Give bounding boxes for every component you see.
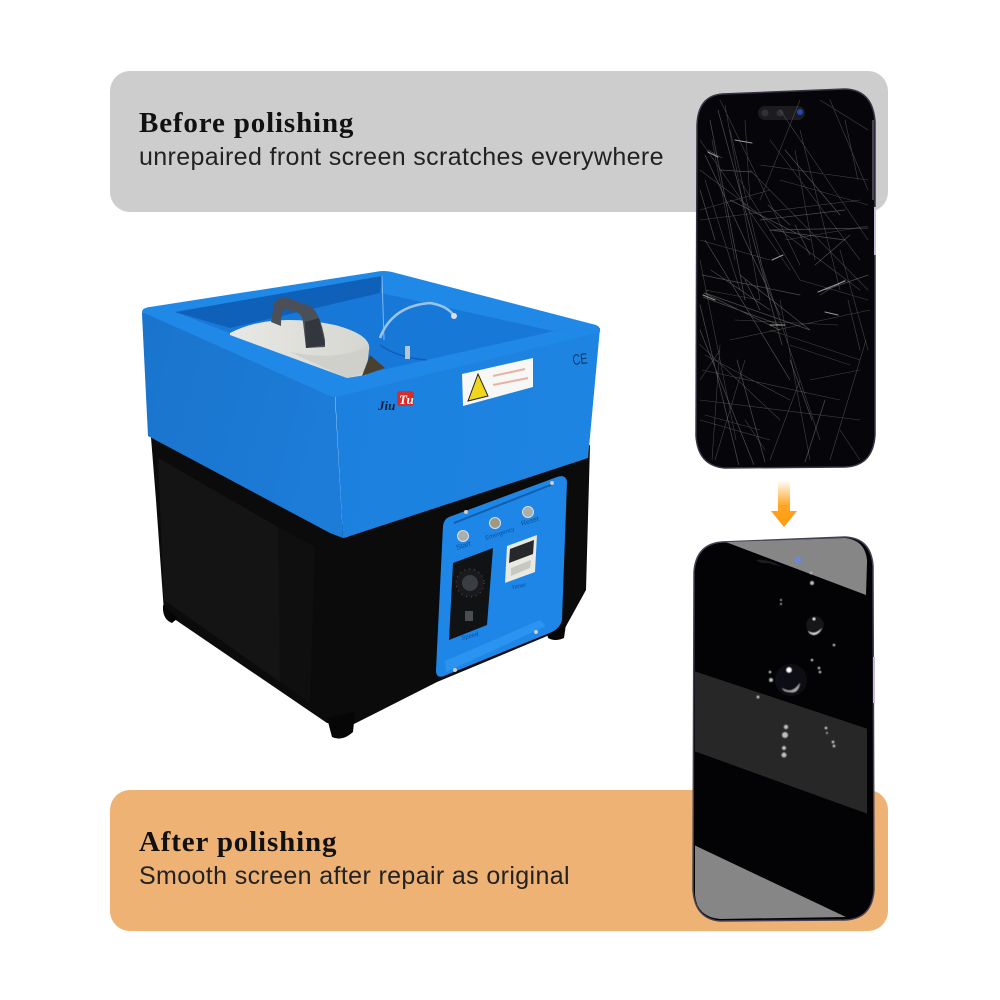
machine: JiuTu logo: Tu	[399, 392, 414, 407]
machine: water tube and post	[380, 303, 457, 359]
machine: polishing weight with handle	[230, 298, 385, 378]
phone: camera island	[758, 106, 805, 120]
machine: warning label	[462, 358, 533, 406]
machine blue top	[142, 271, 600, 538]
product: polishing machine	[142, 271, 600, 739]
machine: JiuTu logo: Jiu	[377, 398, 395, 413]
heading: after polishing: After polishing	[139, 826, 337, 858]
machine: control panel: Speed	[461, 632, 479, 642]
text: before description: unrepaired front screen scratches everywhere	[139, 143, 664, 171]
machine: control panel: Timer	[511, 582, 527, 592]
panel: after polishing	[110, 790, 888, 931]
machine: JiuTu logo	[377, 391, 414, 413]
phone: scratched screen	[695, 89, 875, 480]
arrow: before to after	[771, 480, 797, 527]
phone: scratch lines	[695, 100, 870, 480]
machine: control panel: Reset	[520, 516, 540, 528]
text: after description: Smooth screen after repair as original	[139, 862, 570, 890]
panel: before polishing	[110, 71, 888, 212]
machine: CE mark: CE	[572, 351, 588, 369]
machine: control panel	[436, 476, 567, 677]
phone: screen reflection bands	[694, 530, 868, 922]
machine black base	[150, 425, 590, 739]
phone: polished screen	[693, 530, 874, 922]
machine: control panel: Start	[455, 541, 472, 552]
machine: control panel: Emergency	[485, 527, 515, 542]
phone: water droplets	[756, 572, 835, 758]
heading: before polishing: Before polishing	[139, 107, 354, 139]
